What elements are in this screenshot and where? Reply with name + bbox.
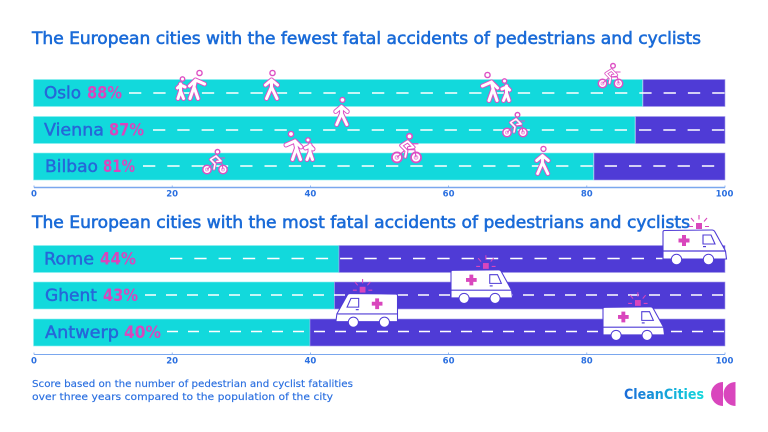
icon: large cyclist, Bilbao xyxy=(392,134,421,162)
row: Rome 44%: 44% xyxy=(100,250,136,268)
footnote: over three years compared to the population of the city xyxy=(32,392,333,403)
icon: cyclist, Oslo xyxy=(598,64,623,88)
row: Antwerp 40%: 40% xyxy=(124,323,161,342)
icon: pedestrian, Bilbao xyxy=(537,146,548,174)
row: Antwerp 40%: Antwerp xyxy=(45,323,119,342)
axis: upper chart scale: 20 xyxy=(166,190,178,200)
icon: cyclist, Vienna xyxy=(503,112,527,137)
row: Ghent 43%: 43% xyxy=(103,286,138,305)
row: Oslo 88%: Oslo xyxy=(44,84,81,102)
title: fewest fatal accidents: The European cities with the fewest fatal accidents of pedestrians and cyclists xyxy=(31,29,701,49)
axis: lower chart scale: 0 xyxy=(31,356,37,366)
row: Ghent 43%: Ghent xyxy=(45,286,98,305)
panel: most accidents chart xyxy=(31,215,733,366)
title: most fatal accidents: The European cities with the most fatal accidents of pedestrians and cyclists xyxy=(31,213,690,233)
axis: upper chart scale: 60 xyxy=(443,190,455,200)
logo: CleanCities xyxy=(624,382,736,406)
row: Rome 44%: Rome xyxy=(44,250,94,268)
row: Ghent 43% xyxy=(34,282,725,309)
icon: adult and child walking left, Bilbao xyxy=(286,131,313,160)
axis: lower chart scale: 20 xyxy=(166,356,178,366)
row: Rome 44% xyxy=(34,246,725,272)
axis: upper chart scale xyxy=(31,186,733,200)
row: Oslo 88% xyxy=(34,80,725,106)
icon: ambulance facing left, Antwerp xyxy=(336,279,398,327)
footnote: Score based on the number of pedestrian and cyclist fatalities xyxy=(32,379,353,390)
panel: fewest accidents chart xyxy=(31,64,733,200)
icon: adult and child walking, Oslo xyxy=(178,70,204,98)
row: Vienna 87% xyxy=(34,116,725,144)
row: Oslo 88%: 88% xyxy=(87,84,122,102)
axis: lower chart scale: 40 xyxy=(304,356,316,366)
row: Bilbao 81%: Bilbao xyxy=(45,157,98,176)
icon: pedestrian, Vienna xyxy=(336,97,347,125)
icon: ambulance, Rome xyxy=(663,215,726,265)
row: Bilbao 81% xyxy=(34,153,725,180)
axis: upper chart scale: 100 xyxy=(716,190,733,200)
axis: lower chart scale xyxy=(31,352,733,366)
footnote xyxy=(32,379,353,403)
axis: upper chart scale: 80 xyxy=(581,190,593,200)
logo: CleanCities: CleanCities xyxy=(624,387,704,403)
icon: ambulance, Antwerp right xyxy=(603,292,665,340)
row: Vienna 87%: 87% xyxy=(109,120,144,140)
icon: pedestrian, Oslo xyxy=(266,70,278,98)
axis: lower chart scale: 60 xyxy=(443,356,455,366)
icon: adult and child walking left, Oslo xyxy=(482,72,510,100)
axis: upper chart scale: 0 xyxy=(31,190,37,200)
row: Vienna 87%: Vienna xyxy=(44,120,104,140)
icon: cyclist, Bilbao xyxy=(203,150,227,174)
row: Bilbao 81%: 81% xyxy=(103,157,135,176)
row: Antwerp 40% xyxy=(34,319,725,346)
icon: ambulance, Ghent xyxy=(451,255,513,303)
axis: lower chart scale: 100 xyxy=(716,356,733,366)
axis: lower chart scale: 80 xyxy=(581,356,593,366)
axis: upper chart scale: 40 xyxy=(304,190,316,200)
